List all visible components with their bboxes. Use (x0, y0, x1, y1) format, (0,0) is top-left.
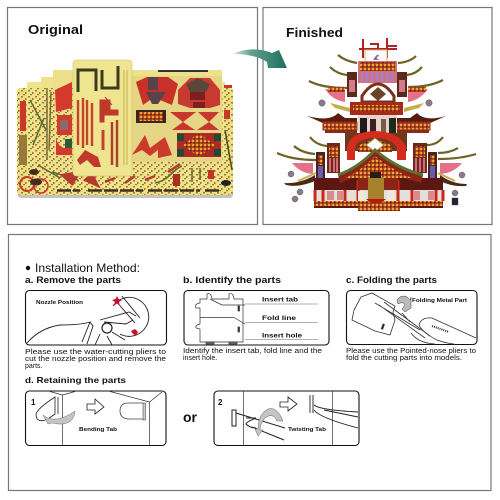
step a: parts. (25, 363, 43, 370)
heading: original: Original (28, 22, 83, 37)
icon: folding pliers (352, 293, 476, 344)
side wings (284, 143, 467, 186)
step d (25, 375, 359, 446)
middle storey (307, 113, 446, 160)
ornaments (288, 100, 465, 205)
arrow (233, 49, 287, 68)
step c: Please use the Pointed-nose pliers to (346, 348, 476, 355)
word: or: or (183, 409, 198, 425)
step a (25, 275, 166, 370)
diagram: bending tab: Bending Tab (79, 427, 118, 433)
step b: Identify the insert tab, fold line and the (183, 348, 322, 355)
step b (183, 275, 329, 362)
metal sheets (17, 60, 233, 198)
sheet 1: red panels (136, 77, 178, 105)
step c: fold the cutting parts into models. (346, 355, 462, 362)
icon: pliers (27, 296, 149, 345)
top tower (325, 38, 428, 115)
step c (346, 275, 477, 362)
labels (245, 296, 318, 340)
icon: part outline (196, 294, 245, 344)
step a: Please use the water-cutting pliers to (25, 349, 166, 356)
diagram: bending tab (26, 391, 166, 446)
pagoda (277, 38, 476, 211)
diagram: twisting tab (214, 391, 359, 446)
diagram: bending tab: 1 (31, 398, 36, 407)
labels: Insert tab (262, 296, 298, 304)
step b: insert hole. (183, 355, 217, 362)
panel: original (8, 8, 258, 224)
step d: d. Retaining the parts (25, 375, 126, 385)
panel: finished (263, 8, 492, 224)
labels: Fold line (262, 315, 296, 322)
heading: installation method: Installation Method: (35, 261, 140, 275)
step a: cut the nozzle position and remove the (25, 356, 166, 363)
step c: c. Folding the parts (346, 275, 437, 286)
step b: b. Identify the parts (183, 275, 281, 286)
step a: Nozzle Position (36, 300, 84, 306)
step c: Folding Metal Part (412, 298, 467, 304)
step a: a. Remove the parts (25, 275, 121, 286)
main gable and base (314, 150, 443, 211)
panel: installation method (8, 234, 491, 490)
sheet 2: front (73, 60, 132, 176)
diagram: twisting tab: 2 (218, 398, 223, 407)
labels: Insert hole (262, 332, 302, 340)
heading: finished: Finished (286, 25, 343, 40)
diagram: twisting tab: Twisting Tab (288, 427, 327, 433)
